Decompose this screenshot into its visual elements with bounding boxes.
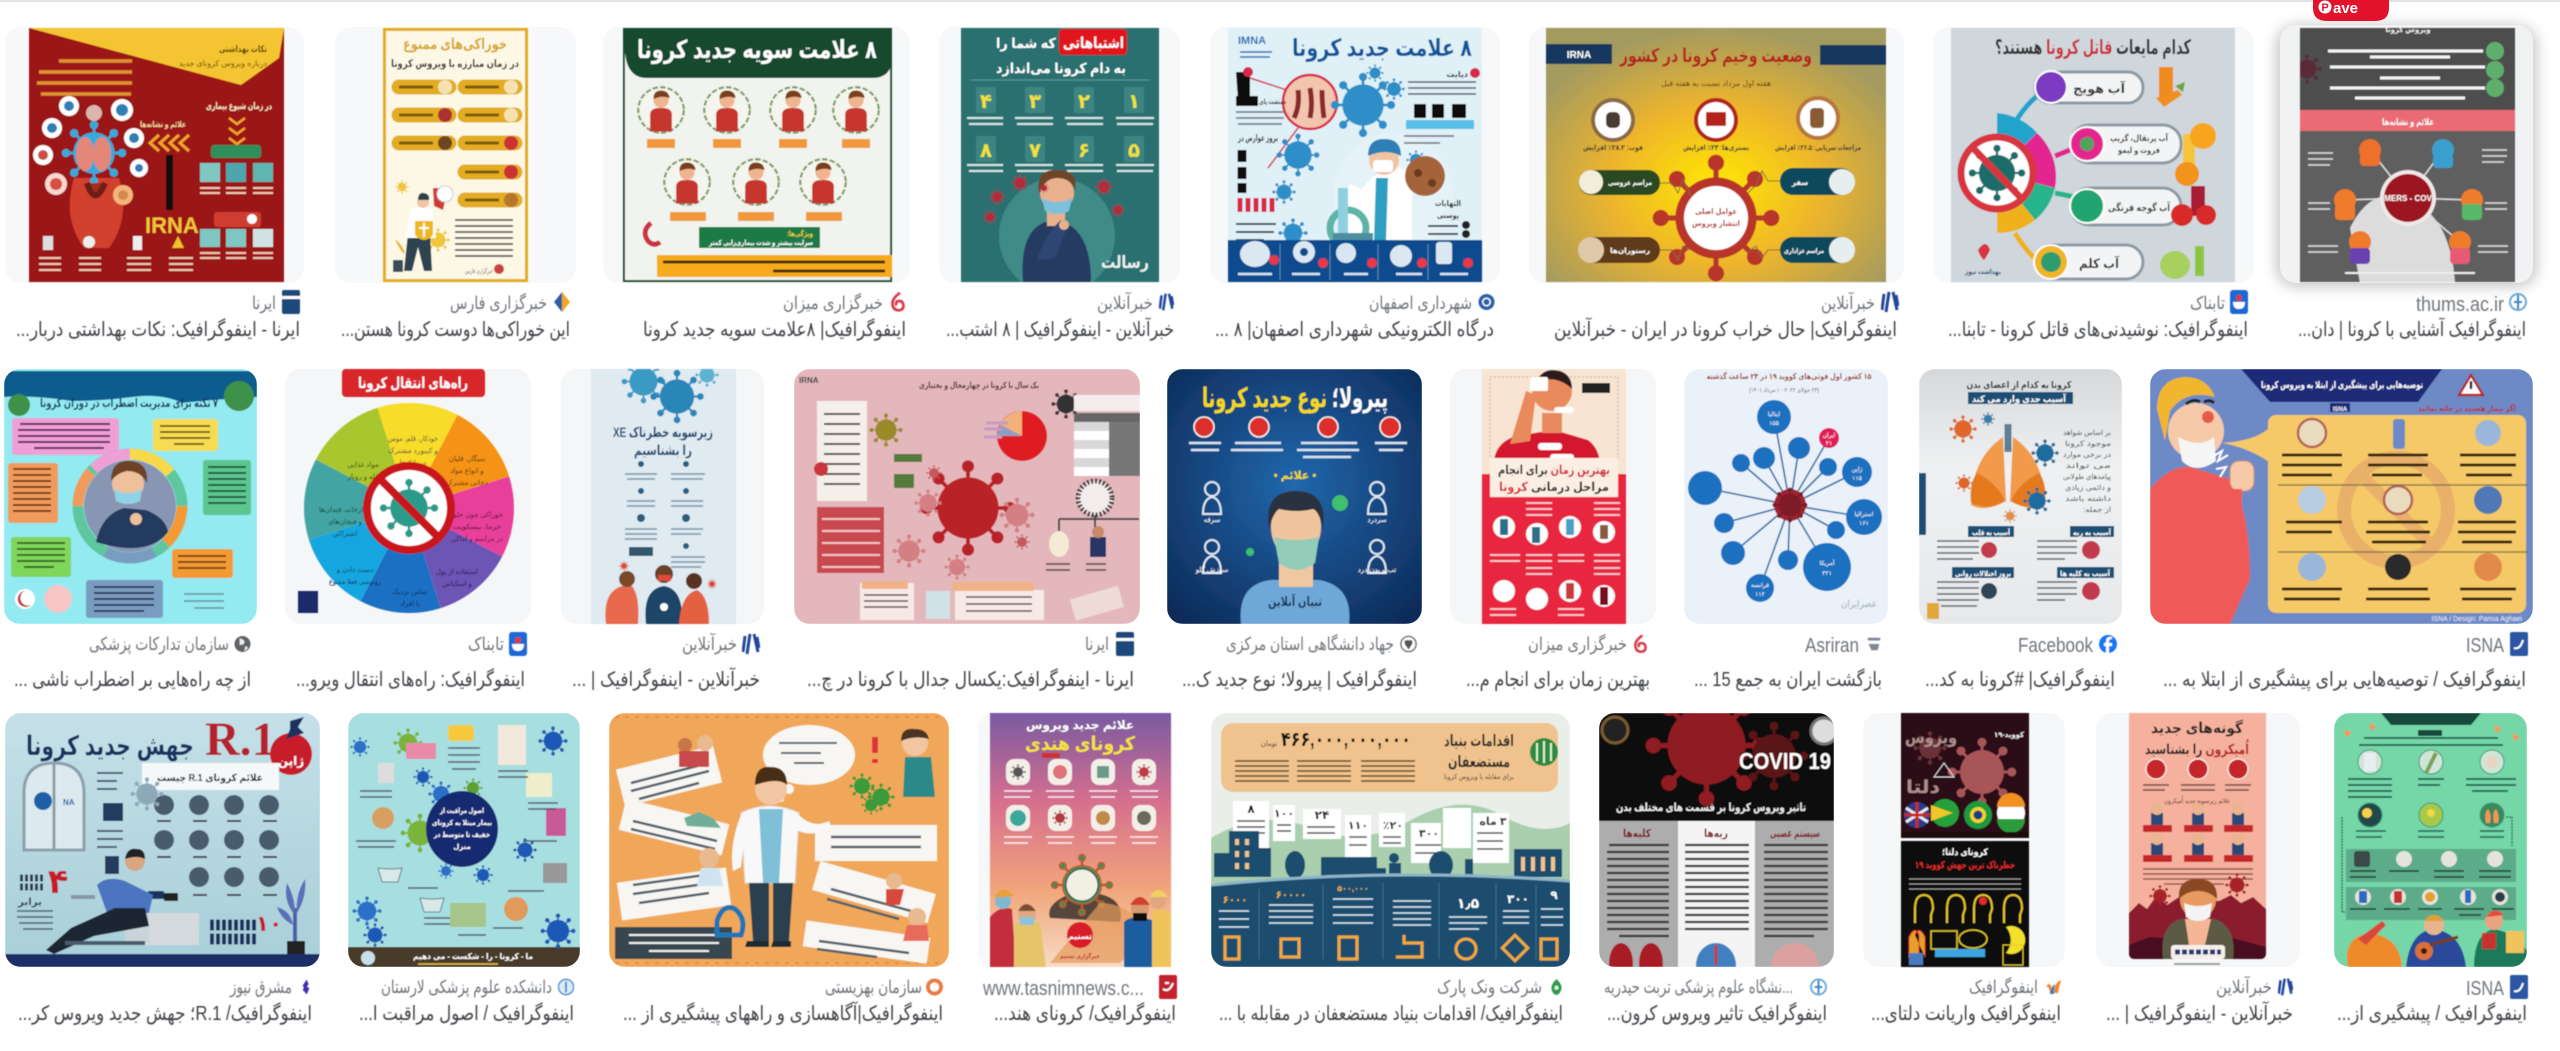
caption: اینفوگرافیک| #کرونا به کد... — [1925, 668, 2115, 691]
thumbnail: foundation actions: ۵۰۰,۰۰۰ — [1337, 884, 1369, 893]
caption: ایرنا - اینفوگرافیک:یکسال جدال با کرونا در چ... — [807, 668, 1134, 692]
card: IRNA health tips — [5, 27, 304, 341]
thumbnail: transmission wheel: در بانک‌ها — [400, 459, 426, 467]
thumbnail: organs damaged by corona: در برخی موارد — [2063, 450, 2111, 459]
thumbnail: 8 signs of new corona: دمنشت پای کوویدی — [1240, 98, 1286, 106]
thumbnail: foundation actions: اقدامات بنیاد — [1444, 733, 1514, 750]
thumbnail: COVID 19 black poster: کلیه‌ها — [1623, 828, 1651, 840]
thumbnail: COVID 19 black poster — [1599, 713, 1834, 967]
thumbnail: teal mistakes poster: به دام کرونا می‌اندازد — [996, 60, 1126, 77]
thumbnail: organs damaged by corona: از جمله: — [2083, 505, 2111, 514]
thumbnail: corona status yellow: انتشار ویروس — [1692, 219, 1740, 229]
thumbnail: R.1 new mutation — [5, 713, 320, 967]
thumbnail: ISNA recommendations: ISNA — [2333, 407, 2348, 413]
thumbnail: 8 signs of new corona: IMNA — [1238, 35, 1266, 47]
thumbnail: teal mistakes poster: ۵ — [1128, 140, 1140, 162]
thumbnail: transmission wheel: خودکار، قلم، موس — [388, 435, 438, 443]
thumbnail: organs damaged by corona: آسیب به کلیه ها — [2060, 568, 2110, 578]
caption: اینفوگرافیک/ اقدامات بنیاد مستضعفان در مقابله با ... — [1219, 1002, 1563, 1025]
thumbnail: which drinks kill corona: کدام مایعات قاتل کرونا هستند؟ — [1995, 37, 2191, 59]
card: delta variant — [1863, 713, 2065, 1025]
source: Tabnak: تابناک — [2190, 293, 2225, 313]
source: Tabnak: تابناک — [468, 634, 504, 654]
thumbnail: organs damaged by corona: پیامدهای طولانی — [2063, 472, 2111, 481]
thumbnail: transmission wheel: روبوسی فعلا ممنوع — [329, 579, 381, 586]
source: Jihad: جهاد دانشگاهی استان مرکزی — [1226, 633, 1394, 655]
caption: اینفوگرافیک / اصول مراقبت ا... — [359, 1002, 574, 1025]
caption: اینفوگرافیک/ R.1؛ جهش جدید ویروس کر... — [18, 1002, 312, 1025]
thumbnail: XE poster: را بشناسیم — [634, 442, 692, 458]
card: transmission routes — [285, 369, 531, 691]
caption: اینفوگرافیک| ۸علامت سویه جدید کرونا — [643, 318, 906, 341]
thumbnail: ISNA recommendations: ISNA / Design: Parisa Aghaei — [2431, 616, 2522, 623]
source: IRNA: ایرنا — [1085, 634, 1109, 655]
thumbnail: home care teal: ما - کرونا - را - شکست - می دهیم — [413, 952, 533, 961]
thumbnail: transmission wheel: و اسکناس — [442, 580, 472, 588]
thumbnail: IRNA red infographic: علائم و نشانه‌ها — [140, 120, 186, 129]
thumbnail: foundation actions: ۹ — [1550, 888, 1558, 902]
thumbnail: corona status yellow: بستری‌ها: ۲۳٪ افزایش — [1683, 143, 1749, 152]
thumbnail: Pirola blue poster — [1167, 369, 1422, 624]
thumbnail: home care teal: خفیف تا متوسط در — [433, 832, 490, 839]
thumbnail: corona status yellow: هفته اول مرداد نسبت به هفته قبل — [1661, 79, 1771, 88]
thumbnail: pink one-year infographic: IRNA — [799, 376, 819, 385]
caption: خبرآنلاین - اینفوگرافیک | ... — [572, 666, 760, 691]
card: R.1 mutation — [5, 713, 320, 1025]
thumbnail: IRNA red infographic — [29, 28, 284, 282]
thumbnail: foundation actions: ۱۰۰ — [1274, 808, 1294, 820]
thumbnail: 15 countries network: ژاپن — [1852, 466, 1862, 473]
thumbnail: teal mistakes poster: ۷ — [1029, 140, 1041, 162]
thumbnail: MERS-COV infographic — [2293, 26, 2515, 283]
thumbnail: transmission wheel: سیگار، قلیان — [449, 454, 485, 463]
thumbnail: 8 signs of new corona — [1228, 28, 1482, 282]
top border line — [0, 0, 2560, 2]
thumbnail: transmission wheel: دست دادن و — [336, 567, 373, 574]
thumbnail: 8 signs of new corona: پوستی — [1437, 211, 1459, 220]
thumbnail: teal mistakes poster: ۸ — [980, 140, 992, 162]
thumbnail: transmission wheel: فله و روباز — [347, 474, 378, 481]
card: Mostazafan foundation — [1211, 713, 1570, 1025]
thumbnail: 8 symptoms poster — [623, 28, 892, 281]
thumbnail: teal mistakes poster: ۶ — [1078, 140, 1090, 162]
caption: اینفوگرافیک/ کرونای هند... — [994, 1002, 1176, 1025]
caption: اینفوگرافیک تاثیر ویروس کرون... — [1607, 1002, 1827, 1025]
thumbnail: home care teal: بیمار مبتلا به کرونای — [432, 819, 492, 827]
thumbnail: which drinks kill corona — [1951, 28, 2235, 282]
thumbnail: 15 countries network: ۱۵۵ — [1769, 421, 1779, 427]
thumbnail: 15 countries network: فرانسه — [1751, 582, 1769, 589]
thumbnail: 7 tips anxiety — [4, 369, 257, 624]
thumbnail: transmission wheel: تماس نزدیک — [392, 588, 428, 596]
caption: اینفوگرافیک / پیشگیری از... — [2337, 1002, 2527, 1026]
thumbnail: transmission wheel: با افراد — [400, 601, 420, 608]
caption: اینفوگرافیک واریانت دلتای... — [1871, 1002, 2061, 1025]
thumbnail: foundation actions — [1211, 713, 1570, 967]
card: COVID body parts — [1599, 686, 1837, 1025]
thumbnail: 15 countries network: آمریکا — [1819, 558, 1835, 567]
thumbnail: transmission wheel: و انواع مواد — [450, 468, 484, 475]
source: Tasnim: www.tasnimnews.c... — [982, 978, 1144, 1000]
caption: خبرآنلاین - اینفوگرافیک | ... — [2106, 1000, 2293, 1025]
source: medical logistics: سازمان تدارکات پزشکی — [89, 634, 229, 655]
source: Khabaronline: خبرآنلاین — [682, 632, 737, 655]
thumbnail: 15 countries network: ۱۱۵ — [1852, 476, 1862, 482]
caption: درگاه الکترونیکی شهرداری اصفهان| ۸ ... — [1215, 318, 1494, 341]
thumbnail: 15 countries network: ۱۵ کشور اول فوتی‌های کووید ۱۹ در ۲۴ ساعت گذشته — [1706, 371, 1872, 381]
thumbnail: corona status yellow: فوت: ۲۸.۲٪ افزایش — [1583, 143, 1643, 152]
thumbnail: MERS-COV infographic: MERS - COV — [2384, 194, 2432, 203]
thumbnail: R.1 new mutation: برابر — [17, 897, 42, 908]
source: Mizan: خبرگزاری میزان — [1528, 633, 1627, 655]
thumbnail: Indian corona poster: کرونای هندی — [1025, 734, 1136, 755]
card: 8 symptoms new strain — [603, 27, 910, 341]
caption: این خوراکی‌ها دوست کرونا هستن... — [341, 319, 570, 341]
thumbnail: transmission wheel: دخانی مشترک — [446, 479, 488, 487]
card: best time for treatment — [1450, 369, 1656, 691]
source: Tabnak — [468, 632, 527, 656]
thumbnail: R.1 new mutation: R.1 — [205, 713, 276, 766]
caption: بهترین زمان برای انجام م... — [1466, 669, 1650, 691]
thumbnail: which drinks kill corona: آب کلم — [2079, 255, 2119, 271]
thumbnail: IRNA red infographic: درباره ویروس کرونای جدید — [179, 59, 267, 68]
caption: اینفوگرافیک|آگاهسازی و راههای پیشگیری از ... — [623, 1000, 943, 1026]
thumbnail: organs damaged by corona: کرونا به کدام از اعضای بدن — [1966, 380, 2072, 391]
thumbnail: Pirola blue poster: تبیان آنلاین — [1268, 593, 1322, 609]
thumbnail: corona status yellow: وضعیت وخیم کرونا در کشور — [1619, 46, 1812, 67]
thumbnail: 15 countries network: ۳۲۱ — [1822, 571, 1832, 577]
caption: بازگشت ایران به جمع 15 ... — [1694, 668, 1882, 691]
thumbnail: teal mistakes poster: ۴ — [980, 91, 992, 113]
thumbnail: delta black poster: دلتا — [1906, 777, 1940, 797]
thumbnail: corona status yellow: رستوران‌ها — [1610, 248, 1650, 255]
thumbnail: which drinks kill corona: آب گوجه فرنگی — [2108, 201, 2170, 214]
thumbnail: 8 signs of new corona: بروز عوارض در — [1237, 133, 1278, 144]
source: Larestan: دانشکده علوم پزشکی لارستان — [381, 977, 552, 998]
thumbnail: corona status yellow: عوامل اصلی — [1695, 207, 1737, 216]
card: omicron — [2096, 713, 2300, 1025]
thumbnail: foundation actions: ۳۰۰ — [1419, 828, 1439, 840]
thumbnail: teal mistakes poster: ۲ — [1078, 91, 1090, 113]
thumbnail: R.1 new mutation: جهش جدید کرونا — [26, 731, 194, 762]
thumbnail: foundation actions: تومان — [1261, 741, 1277, 748]
thumbnail: transmission wheel: و فنجان‌های — [328, 519, 362, 526]
thumbnail: R.1 new mutation: علائم کرونای R.1 چیست — [157, 773, 263, 784]
thumbnail: foundation actions: برای مقابله با ویروس کرونا — [1444, 773, 1514, 781]
thumbnail: omicron salmon poster: علائم زیرسویه جدید اُمیکرون — [2164, 796, 2230, 805]
source: Khabaronline: خبرآنلاین — [1097, 291, 1153, 314]
thumbnail: pink one-year infographic — [794, 369, 1140, 624]
thumbnail: transmission wheel — [298, 369, 514, 613]
thumbnail: omicron salmon poster — [2129, 713, 2266, 964]
thumbnail: which drinks kill corona: فروت و لیمو — [2117, 145, 2160, 156]
source: Mizan: خبرگزاری میزان — [783, 292, 883, 314]
source: Behzisti: سازمان بهزیستی — [825, 977, 922, 998]
thumbnail: foundation actions: ۱۱۰ — [1348, 820, 1368, 832]
thumbnail: teal mistakes poster: ۳ — [1029, 91, 1041, 113]
thumbnail: organs damaged by corona: می تواند — [2065, 461, 2111, 470]
source: Torbat Heydarieh: ...نشگاه علوم پزشکی تربت حیدریه — [1604, 976, 1793, 998]
caption: خبرآنلاین - اینفوگرافیک | ۸ اشتب... — [946, 316, 1174, 341]
source: thums.ac.ir: thums.ac.ir — [2416, 294, 2504, 316]
thumbnail: corona status yellow: مراسم عزاداری — [1784, 248, 1824, 255]
thumbnail: Pirola blue poster: سرفه — [1204, 517, 1221, 524]
thumbnail: R.1 new mutation: ۱۰ — [256, 911, 282, 936]
thumbnail: ISNA recommendations: اگر بیمار هستید در خانه بمانید — [2418, 403, 2516, 413]
thumbnail: 8 signs of new corona: التهابات — [1435, 199, 1461, 208]
thumbnail: transmission wheel: و کیبورد مشترک — [388, 447, 438, 455]
thumbnail: 15 countries network: ۲۱ — [1826, 441, 1832, 447]
thumbnail: IRNA red infographic: IRNA — [145, 213, 199, 238]
card: Asriran network — [1684, 369, 1888, 691]
thumbnail: transmission wheel: خوراکی چون حلوا — [451, 511, 503, 519]
thumbnail: transmission wheel: آبدارخانه، قندان‌ها — [319, 505, 372, 514]
thumbnail: 8 signs of new corona: دیابت — [1446, 70, 1468, 79]
thumbnail: teal mistakes poster: ۱ — [1128, 91, 1140, 113]
thumbnail: foundation actions: مستضعفان — [1448, 754, 1510, 771]
card: Isfahan 8 signs — [1210, 27, 1500, 341]
caption: اینفوگرافیک| حال خراب کرونا در ایران - خبرآنلاین — [1554, 316, 1897, 341]
thumbnail: corona status yellow: IRNA — [1567, 50, 1591, 61]
thumbnail: R.1 new mutation: NA — [63, 798, 75, 807]
thumbnail: corona status yellow: سفر — [1791, 180, 1808, 187]
thumbnail: Pirola blue poster: تب و بدن درد — [1358, 567, 1396, 574]
thumbnail: 15 countries network — [1684, 369, 1888, 624]
source: Tabnak — [2190, 290, 2248, 314]
thumbnail: Pirola blue poster: • علائم • — [1274, 470, 1316, 482]
thumbnail: 15 countries network: عصرایران — [1841, 599, 1877, 610]
source: Infographic: اینفوگرافیک — [1969, 976, 2038, 998]
thumbnail: 15 countries network: ایران — [1823, 432, 1836, 439]
thumbnail: teal mistakes poster: اشتباهاتی — [1063, 35, 1124, 52]
card: 8 mistakes — [939, 27, 1180, 341]
thumbnail: MERS-COV infographic: ویروس کرونا — [2385, 26, 2431, 34]
thumbnail: best time treatment — [1482, 369, 1626, 624]
thumbnail: transmission wheel: مواد غذایی — [347, 462, 379, 469]
thumbnail: which drinks kill corona: آب پرتقال، گریپ — [2110, 132, 2169, 144]
thumbnail: Indian corona poster: علائم جدید ویروس — [1026, 718, 1134, 733]
caption: ایرنا - اینفوگرافیک: نکات بهداشتی دربار... — [16, 318, 300, 341]
card: anxiety management — [4, 369, 257, 691]
thumbnail: organs damaged by corona: بروز اختلالات روانی — [1955, 569, 2011, 578]
card: country corona status — [1529, 27, 1904, 341]
source: ISNA: ISNA — [2466, 635, 2505, 657]
thumbnail: foundation actions: ۳۰۰ — [1507, 892, 1529, 906]
thumbnail: transmission wheel: خرما، بیسکویت — [453, 523, 501, 531]
source: IRNA — [252, 290, 300, 314]
card: deadly drinks — [1933, 27, 2254, 341]
thumbnail: which drinks kill corona: بهداشت نیوز — [1964, 269, 2001, 276]
thumbnail: transmission wheel: در مراسم و اماکن — [451, 535, 503, 543]
thumbnail: home care teal: اصول مراقبت از — [439, 808, 484, 815]
card: Indian corona — [978, 713, 1177, 1025]
save button: P — [2321, 2, 2329, 14]
thumbnail: foundation actions: ۲۴ — [1315, 808, 1329, 822]
caption: اینفوگرافیک: راه‌های انتقال ویرو... — [296, 668, 525, 691]
card: Pirola — [1167, 369, 1422, 692]
thumbnail: foundation actions: ۶۰۰۰۰ — [1276, 890, 1306, 901]
thumbnail: which drinks kill corona: آب هویج — [2073, 80, 2126, 96]
card: organs damage — [1919, 369, 2122, 691]
thumbnail: best time treatment: بهترین زمان برای انجام — [1498, 463, 1610, 478]
source: IRNA — [1085, 632, 1134, 656]
thumbnail: organs damaged by corona: موجود کرونا — [2065, 439, 2111, 448]
thumbnail: green prevention poster — [2334, 713, 2527, 967]
thumbnail: 15 countries network: ایتالیا — [1768, 411, 1781, 418]
thumbnail: XE poster — [591, 360, 736, 624]
thumbnail: 15 countries network: استرالیا — [1855, 511, 1874, 518]
thumbnail: organs damaged by corona: آسیب جدی وارد می کند — [1972, 393, 2067, 405]
thumbnail: 8 symptoms poster: سرایت بیشتر و شدت بیماری‌زایی کمتر — [708, 239, 813, 247]
thumbnail: IRNA red infographic: نکات بهداشتی — [219, 44, 267, 55]
source: Fars: خبرگزاری فارس — [450, 292, 547, 314]
thumbnail: organs damaged by corona: و دائمی زیادی — [2065, 483, 2111, 492]
thumbnail: Indian corona poster: تسنیم — [1068, 932, 1092, 941]
thumbnail: organs damaged by corona: آسیب به قلب — [1972, 527, 2010, 537]
thumbnail: delta black poster — [1901, 713, 2029, 967]
thumbnail: teal mistakes poster: که شما را — [996, 35, 1057, 51]
thumbnail: Indian corona poster — [990, 713, 1171, 967]
card: one year with corona — [794, 369, 1140, 692]
card: forbidden foods — [335, 27, 576, 341]
thumbnail: omicron salmon poster: اُمیکرون را بشناسید — [2145, 739, 2249, 758]
thumbnail: forbidden foods poster: خبرگزاری فارس — [465, 267, 493, 275]
thumbnail: transmission wheel: اشتراکی — [333, 530, 357, 538]
thumbnail: foundation actions: ۸ — [1247, 802, 1255, 816]
save button — [2313, 0, 2389, 21]
thumbnail: home care teal — [348, 713, 580, 967]
thumbnail: ISNA recommendations — [2150, 369, 2533, 624]
save button: ave — [2333, 0, 2358, 17]
source: ISNA: ISNA — [2466, 978, 2505, 1000]
source: Khabaronline: خبرآنلاین — [2216, 975, 2272, 998]
thumbnail: organs damaged by corona: داشته باشد — [2065, 494, 2111, 503]
card: awareness Behzisti — [609, 713, 949, 1026]
thumbnail: teal mistakes poster — [961, 28, 1159, 294]
thumbnail: teal mistakes poster: رسالت — [1101, 253, 1149, 272]
thumbnail: Indian corona poster: خبرگزاری تسنیم — [1060, 952, 1100, 960]
thumbnail: ISNA recommendations: توصیه‌هایی برای پیشگیری از ابتلا به ویروس کرونا — [2261, 379, 2423, 391]
source: ISNA — [2466, 975, 2528, 1000]
thumbnail: foundation actions: ۳ ماه — [1479, 816, 1507, 828]
thumbnail: transmission wheel: راه‌های انتقال کرونا — [358, 375, 468, 392]
thumbnail: forbidden foods poster — [384, 30, 526, 280]
thumbnail: 8 symptoms poster: ویژگی‌ها: — [787, 229, 813, 238]
caption: از چه راه‌هایی بر اضطراب ناشی ... — [14, 669, 251, 691]
source: ISNA — [2466, 632, 2528, 657]
thumbnail: home care teal: منزل — [453, 844, 471, 851]
thumbnail: transmission wheel: استفاده از پول — [436, 569, 478, 576]
thumbnail: foundation actions: ۱٫۵ — [1457, 895, 1480, 911]
thumbnail: delta black poster: کووید-۱۹ — [1994, 731, 2025, 739]
thumbnail: Pirola blue poster: سوزش گلو — [1195, 565, 1228, 574]
source: IRNA: ایرنا — [252, 293, 276, 314]
caption: اینفوگرافیک | پیرولا؛ نوع جدید ک... — [1182, 668, 1417, 692]
source: Khabaronline: خبرآنلاین — [1821, 291, 1875, 314]
source: Isfahan: شهرداری اصفهان — [1369, 293, 1472, 314]
thumbnail: R.1 new mutation: ژاپن — [278, 754, 304, 768]
card: ISNA prevention — [2150, 369, 2533, 692]
source: Mashregh: مشرق نیوز — [229, 977, 292, 998]
source: Facebook: Facebook — [2018, 635, 2094, 657]
thumbnail: pink one-year infographic: یک سال با کرونا در چهارمحال و بختیاری — [919, 380, 1039, 391]
thumbnail: foundation actions: ٪۲۰ — [1383, 820, 1403, 832]
thumbnail: 15 countries network: ۱۶۱ — [1859, 521, 1869, 527]
thumbnail: organs damaged by corona: بر اساس شواهد — [2063, 428, 2111, 437]
card: care at home — [348, 713, 580, 1025]
source: Asriran: Asriran — [1805, 635, 1859, 657]
card: XE subvariant — [561, 360, 764, 691]
thumbnail: Pirola blue poster: پیرولا؛ نوع جدید کرونا — [1202, 383, 1388, 414]
thumbnail: delta black poster: ویروس — [1905, 730, 1957, 747]
thumbnail: orange doctor infographic — [609, 713, 949, 967]
thumbnail: 15 countries network: (۲۳ جولای ۲۰۲۲ - ۱ مرداد ۱۴۰۱) — [1749, 387, 1819, 394]
thumbnail: Pirola blue poster: سردرد — [1367, 517, 1387, 524]
thumbnail: omicron salmon poster: گونه‌های جدید — [2151, 719, 2243, 737]
card: ISNA prevention green — [2334, 713, 2528, 1026]
thumbnail: foundation actions: ۶۰۰۰ — [1223, 895, 1247, 906]
thumbnail: MERS-COV infographic: علائم و نشانه‌ها — [2382, 117, 2434, 128]
caption: اینفوگرافیک: نوشیدنی‌های قاتل کرونا - تابنا... — [1948, 318, 2248, 341]
thumbnail: corona status yellow — [1546, 28, 1886, 282]
thumbnail: R.1 new mutation: ۴ — [48, 863, 68, 901]
thumbnail: corona status yellow: مراجعات سرپایی: ۲۶.۵٪ افزایش — [1775, 143, 1861, 152]
thumbnail: corona status yellow: مراسم عروسی — [1608, 180, 1652, 187]
thumbnail: delta black poster: کرونای دلتا؛ — [1942, 847, 1989, 858]
thumbnail: 15 countries network: ۱۱۲ — [1755, 592, 1765, 598]
thumbnail: organs damaged by corona: آسیب به ریه — [2073, 527, 2111, 537]
thumbnail: foundation actions: ۴۶۶,۰۰۰,۰۰۰,۰۰۰ — [1281, 729, 1411, 751]
thumbnail: COVID 19 black poster: ریه‌ها — [1704, 828, 1728, 840]
thumbnail: organs damaged by corona — [1919, 369, 2122, 624]
source: Vanak Park: شرکت ونک پارک — [1437, 977, 1542, 998]
card: corona introduction, hovered — [2276, 25, 2537, 341]
thumbnail: best time treatment: مراحل درمانی کرونا — [1499, 480, 1609, 494]
